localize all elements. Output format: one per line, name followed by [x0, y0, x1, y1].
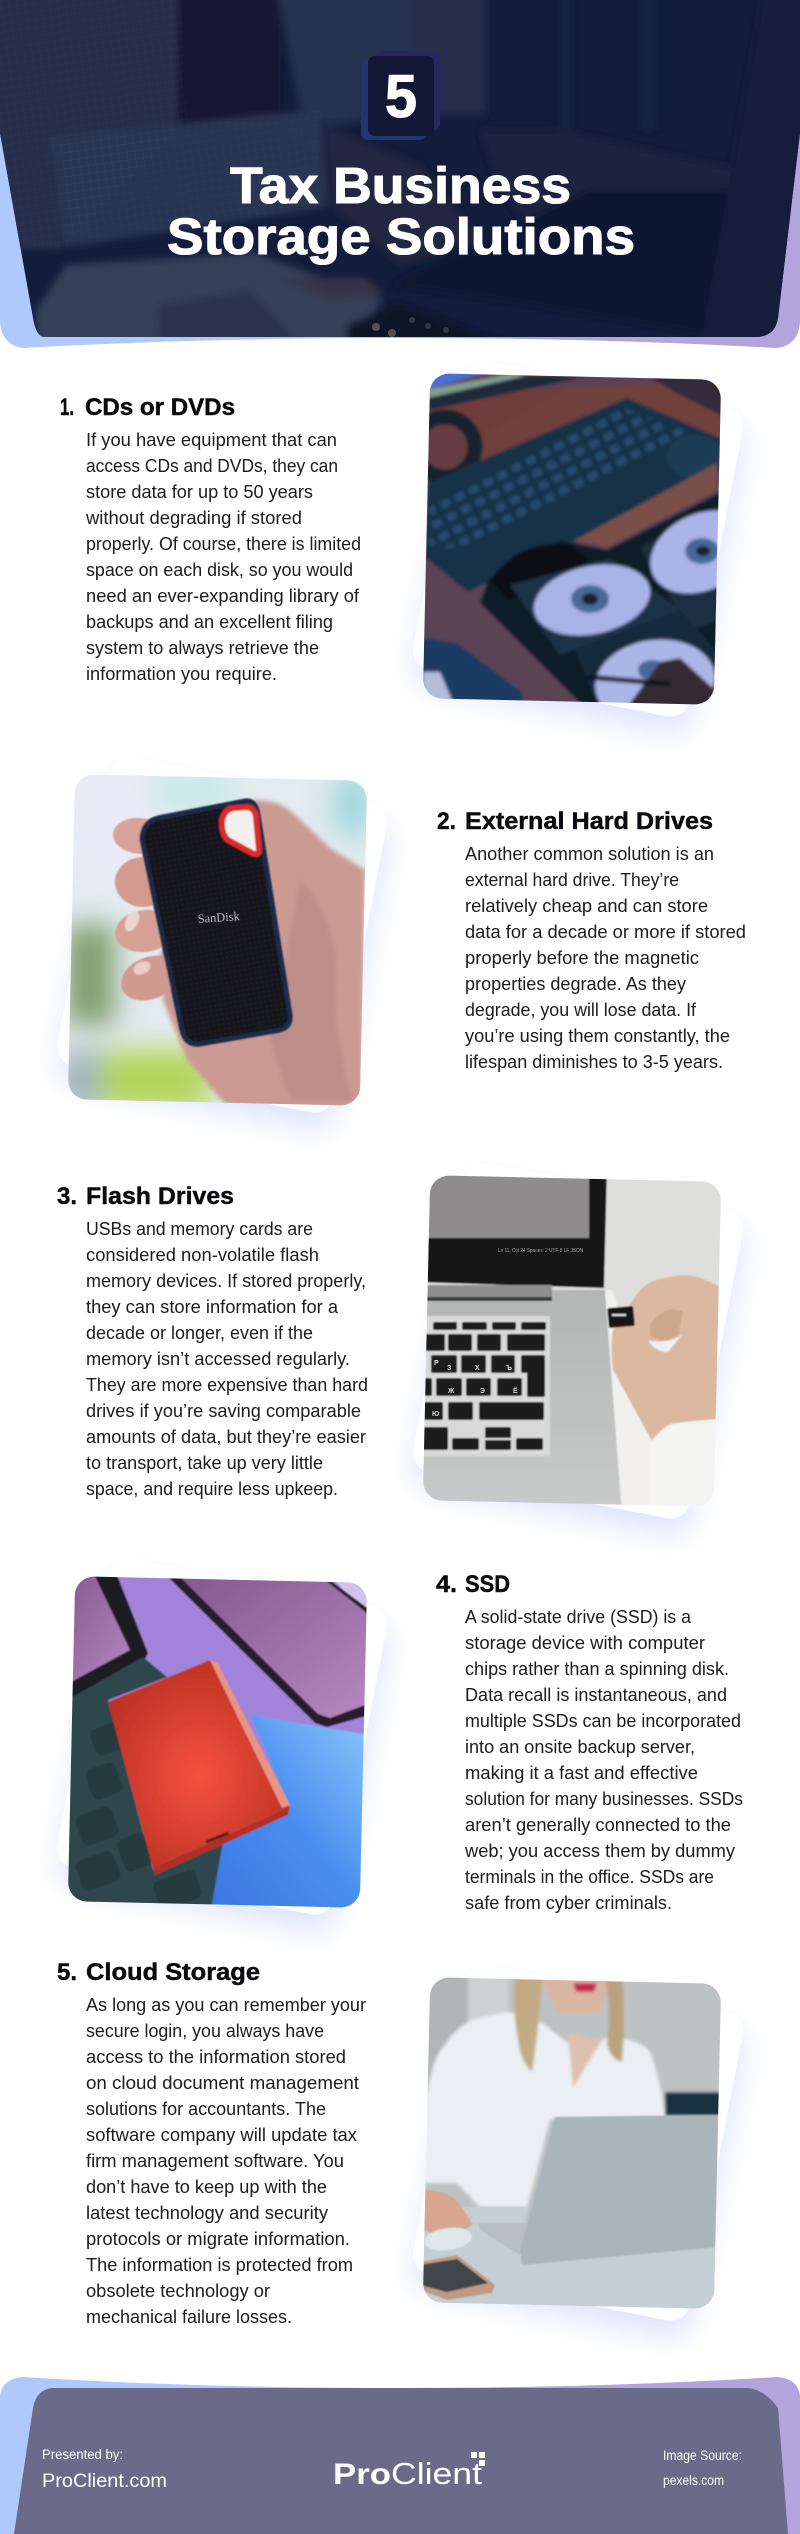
key legends: З — [447, 1365, 452, 1372]
body 2: data for a decade or more if stored — [465, 922, 746, 942]
body 5: protocols or migrate information. — [86, 2229, 350, 2249]
image 2: SanDisk drive in hand — [54, 754, 390, 1116]
backing card — [410, 358, 746, 720]
footer band — [0, 2377, 800, 2534]
body 3: USBs and memory cards are — [86, 1219, 313, 1239]
heading 4: 4. — [436, 1571, 457, 1598]
image 4: red SSD on purple desk — [54, 1556, 390, 1918]
backing card — [54, 1556, 390, 1918]
body 3: to transport, take up very little — [86, 1453, 323, 1473]
logo: Pro — [333, 2458, 391, 2491]
body 1: without degrading if stored — [85, 508, 302, 528]
body 5: The information is protected from — [86, 2255, 353, 2275]
body 4: solution for many businesses. SSDs — [465, 1789, 743, 1809]
key legends: Ж — [447, 1388, 455, 1395]
header band — [0, 0, 800, 348]
photo — [68, 774, 367, 1106]
body 1: access CDs and DVDs, they can — [86, 456, 338, 476]
backing card — [410, 1962, 746, 2324]
body 4: into an onsite backup server, — [465, 1737, 695, 1757]
backing card — [410, 1160, 746, 1522]
heading 4: SSD — [465, 1571, 510, 1598]
key legends: Ъ — [506, 1365, 512, 1372]
photo — [68, 1576, 367, 1908]
section 2: External Hard Drives text — [437, 808, 746, 1072]
body 3: decade or longer, even if the — [86, 1323, 313, 1343]
body 4: aren’t generally connected to the — [465, 1815, 731, 1835]
body 1: If you have equipment that can — [86, 430, 337, 450]
body 5: software company will update tax — [86, 2125, 357, 2145]
section 3: Flash Drives text — [57, 1183, 368, 1499]
body 5: obsolete technology or — [86, 2281, 270, 2301]
title — [167, 157, 635, 265]
body 3: memory devices. If stored properly, — [86, 1271, 366, 1291]
body 1: information you require. — [86, 664, 277, 684]
key legends: P — [434, 1360, 439, 1367]
body 2: external hard drive. They’re — [465, 870, 679, 890]
body 2: properly before the magnetic — [465, 948, 699, 968]
image source: Image Source: — [663, 2448, 742, 2463]
section 5: Cloud Storage text — [57, 1959, 366, 2327]
header gradient backing — [0, 0, 800, 348]
heading 2: External Hard Drives — [465, 808, 713, 835]
photo — [423, 1978, 721, 2308]
body 4: terminals in the office. SSDs are — [465, 1867, 714, 1887]
body 5: access to the information stored — [86, 2047, 346, 2067]
body 3: memory isn’t accessed regularly. — [86, 1349, 350, 1369]
presented by — [42, 2447, 167, 2492]
body 5: mechanical failure losses. — [86, 2307, 292, 2327]
key legends: Х — [475, 1365, 480, 1372]
body 3: amounts of data, but they’re easier — [86, 1427, 366, 1447]
body 4: chips rather than a spinning disk. — [465, 1659, 729, 1679]
photo — [423, 374, 721, 704]
number badge — [361, 51, 440, 140]
body 5: don’t have to keep up with the — [86, 2177, 327, 2197]
heading 2: 2. — [437, 808, 456, 835]
body 2: lifespan diminishes to 3-5 years. — [465, 1052, 723, 1072]
body 2: relatively cheap and can store — [465, 896, 708, 916]
body 1: store data for up to 50 years — [86, 482, 313, 502]
body 1: need an ever-expanding library of — [86, 586, 360, 606]
section 4: SSD text — [436, 1571, 743, 1913]
image source — [663, 2448, 742, 2488]
body 2: degrade, you will lose data. If — [465, 1000, 697, 1020]
key legends: Ю — [432, 1411, 439, 1418]
body 3: drives if you’re saving comparable — [86, 1401, 361, 1421]
body 4: A solid-state drive (SSD) is a — [465, 1607, 692, 1627]
body 5: latest technology and security — [86, 2203, 328, 2223]
presented by: ProClient.com — [42, 2471, 167, 2492]
body 1: space on each disk, so you would — [86, 560, 353, 580]
body 2: Another common solution is an — [465, 844, 714, 864]
body 4: making it a fast and effective — [465, 1763, 698, 1783]
section 1: CDs or DVDs text — [60, 394, 361, 684]
title: Storage Solutions — [167, 208, 635, 265]
backing card — [54, 754, 390, 1116]
body 1: system to always retrieve the — [86, 638, 319, 658]
number badge: 5 — [385, 63, 417, 130]
body 4: Data recall is instantaneous, and — [465, 1685, 727, 1705]
brand label: SanDisk — [197, 909, 241, 926]
body 1: backups and an excellent filing — [86, 612, 333, 632]
image 1: CDs and keyboard — [410, 358, 767, 732]
heading 1: CDs or DVDs — [85, 394, 235, 421]
body 5: on cloud document management — [86, 2073, 359, 2093]
body 3: they can store information for a — [86, 1297, 339, 1317]
footer gradient backing — [0, 2377, 800, 2534]
body 5: secure login, you always have — [86, 2021, 324, 2041]
title: Tax Business — [230, 157, 571, 214]
heading 3: 3. — [57, 1183, 77, 1210]
body 3: They are more expensive than hard — [86, 1375, 368, 1395]
body 1: properly. Of course, there is limited — [86, 534, 361, 554]
body 2: you’re using them constantly, the — [465, 1026, 730, 1046]
body 5: As long as you can remember your — [86, 1995, 366, 2015]
image 5: woman at laptop — [410, 1962, 746, 2324]
body 4: multiple SSDs can be incorporated — [465, 1711, 741, 1731]
body 1 — [85, 430, 361, 684]
body 3: space, and require less upkeep. — [86, 1479, 338, 1499]
body 5 — [86, 1995, 366, 2327]
body 4: storage device with computer — [465, 1633, 705, 1653]
body 4: web; you access them by dummy — [464, 1841, 735, 1861]
body 2: properties degrade. As they — [465, 974, 686, 994]
body 3 — [86, 1219, 368, 1499]
heading 4 — [436, 1571, 510, 1598]
image source: pexels.com — [663, 2473, 724, 2488]
footer panel — [14, 2388, 788, 2534]
body 5: solutions for accountants. The — [86, 2099, 326, 2119]
key legends: Ё — [513, 1387, 518, 1395]
body 4 — [464, 1607, 743, 1913]
photo — [423, 1176, 721, 1506]
heading 3: Flash Drives — [86, 1183, 234, 1210]
body 2 — [465, 844, 746, 1072]
key legends: Э — [480, 1388, 485, 1395]
logo — [333, 2452, 485, 2491]
body 5: firm management software. You — [86, 2151, 344, 2171]
heading 5: 5. — [57, 1959, 77, 1986]
image 3: USB stick in laptop — [410, 1160, 746, 1522]
body 4: safe from cyber criminals. — [465, 1893, 672, 1913]
key legends — [432, 1360, 518, 1418]
body 3: considered non-volatile flash — [86, 1245, 319, 1265]
presented by: Presented by: — [42, 2447, 123, 2462]
header photo: accountant at laptop — [0, 0, 800, 345]
heading 1: 1. — [60, 394, 74, 421]
logo: Client — [391, 2456, 482, 2491]
heading 5: Cloud Storage — [86, 1959, 260, 1986]
screen status text: Ln 11, Col 24 Spaces: 2 UTF-8 LF JSON — [498, 1248, 583, 1254]
